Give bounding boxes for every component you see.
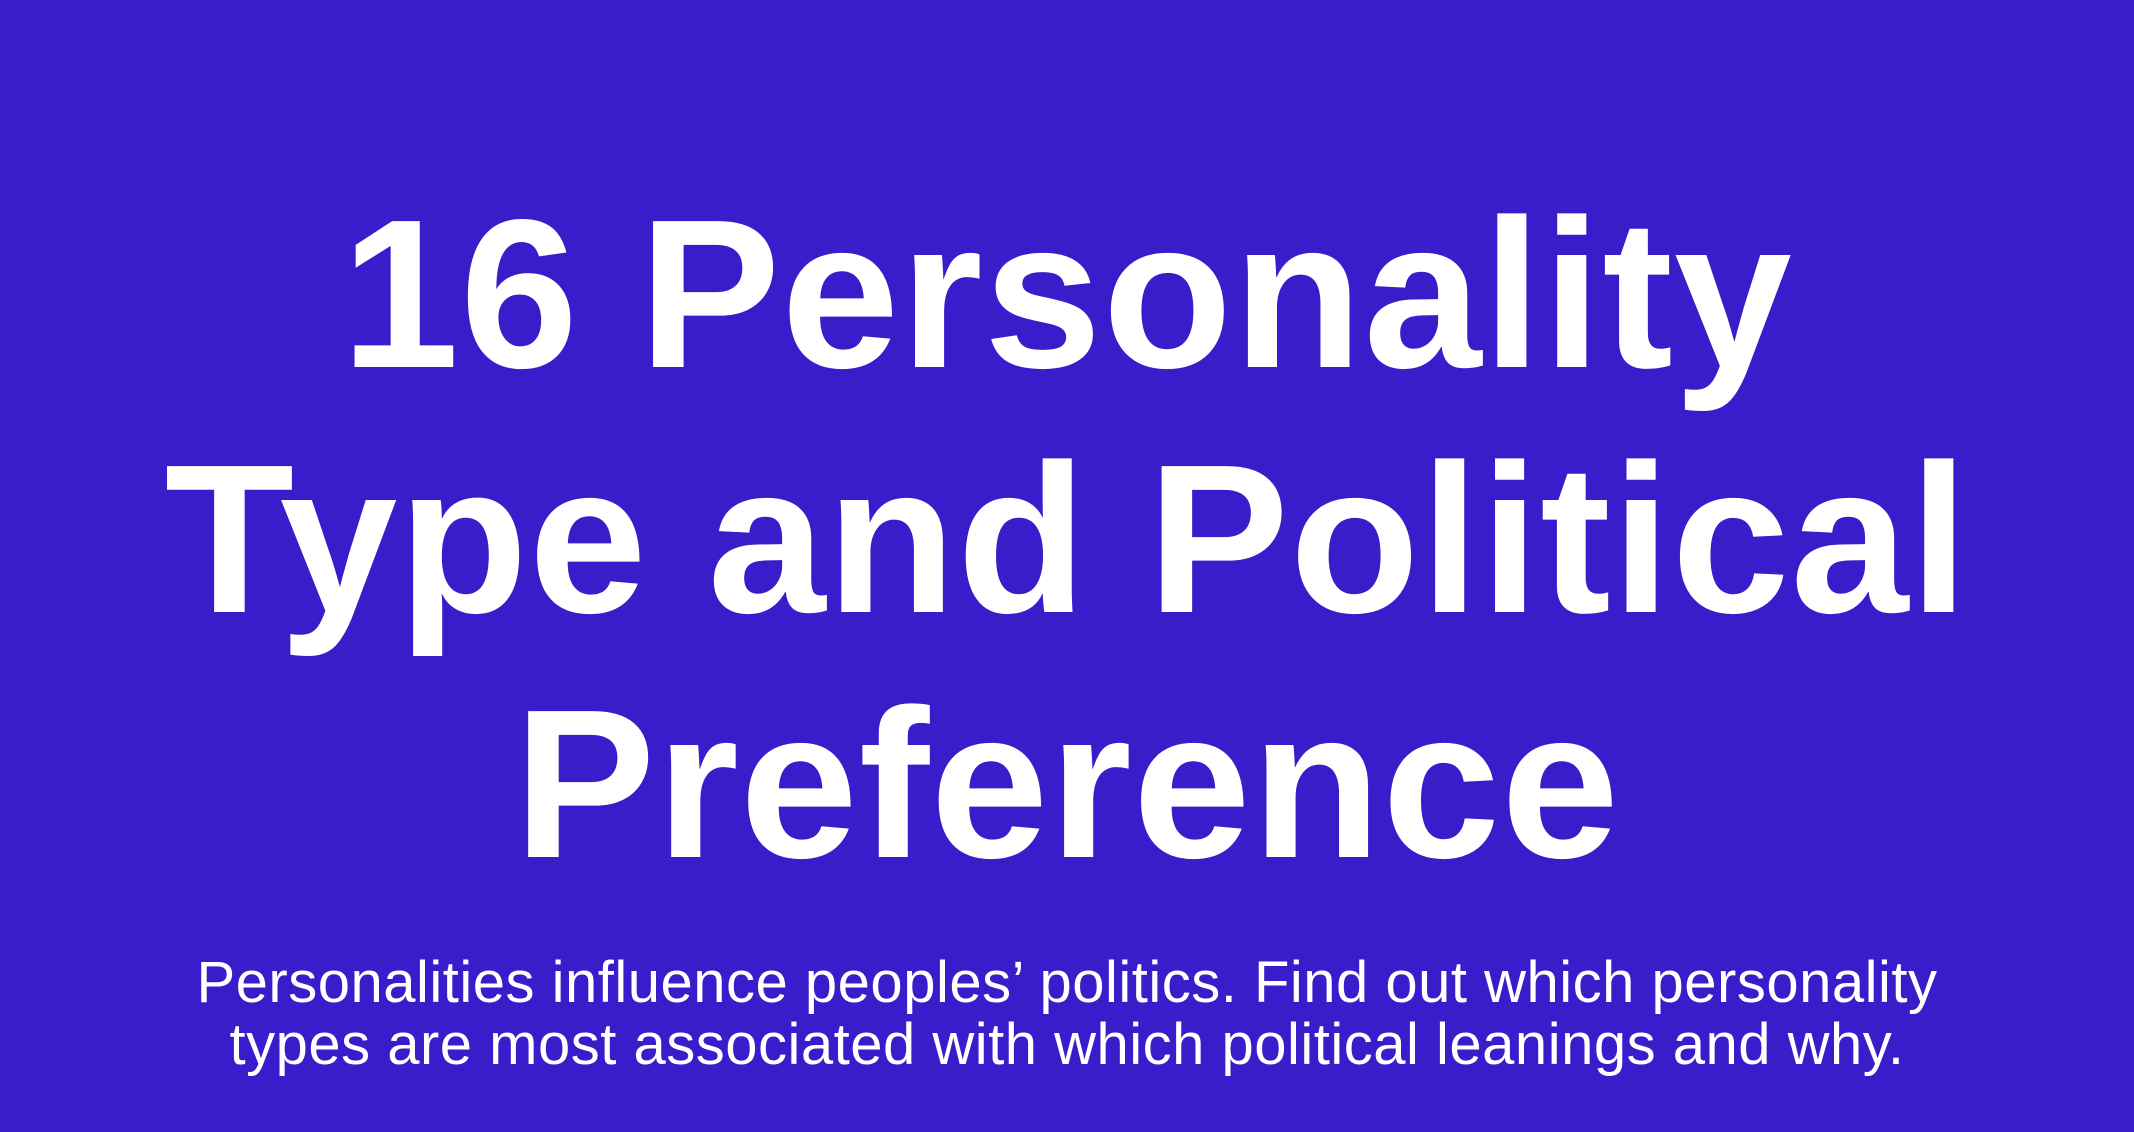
title (165, 175, 1969, 902)
title: 16 Personality (341, 175, 1793, 412)
title: Type and Political (165, 420, 1969, 657)
title: Preference (514, 665, 1620, 902)
subtitle text: types are most associated with which political leanings and why. (229, 1012, 1905, 1077)
subtitle text (196, 950, 1938, 1077)
subtitle text: Personalities influence peoples’ politics. Find out which personality (196, 950, 1938, 1015)
